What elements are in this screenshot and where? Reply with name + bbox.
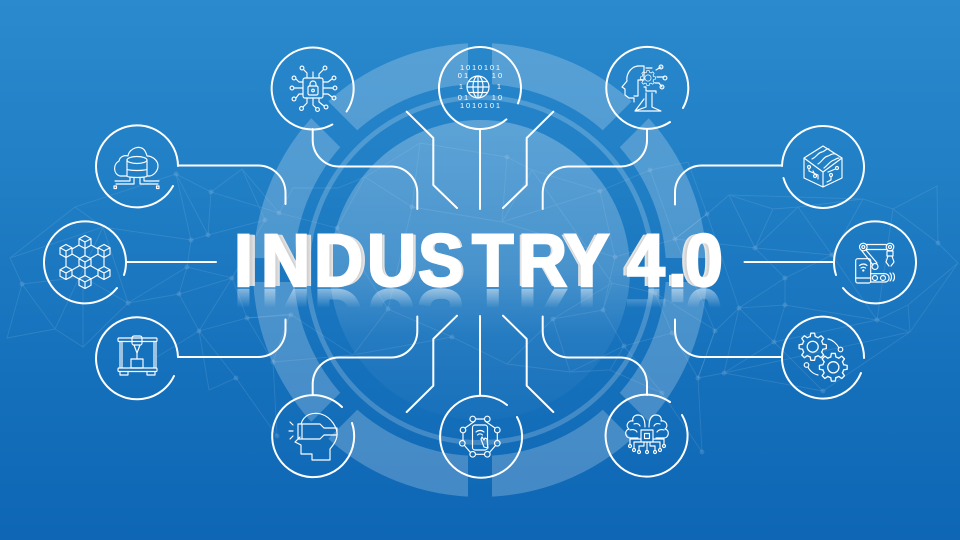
badge: globe with binary data: 1 — [497, 82, 501, 91]
badge: AI brain chip — [606, 395, 688, 477]
segmented outer ring — [274, 64, 686, 476]
title: INDUSTRY 4.0: I — [234, 219, 253, 302]
title: INDUSTRY 4.0: D — [314, 219, 363, 302]
badge: globe with binary data — [439, 47, 521, 129]
title: INDUSTRY 4.0: 4 — [627, 219, 665, 302]
badge: connected blocks — [44, 221, 126, 303]
badge: mobile device network — [440, 396, 522, 478]
title: INDUSTRY 4.0: U — [367, 219, 416, 302]
central ring graphic — [254, 43, 706, 497]
badge: globe with binary data: 0 1 — [458, 71, 468, 80]
title reflection — [237, 288, 720, 306]
badge: globe with binary data: 1 — [459, 82, 463, 91]
badge: globe with binary data: 1 0 1 0 1 0 1 — [460, 101, 500, 110]
badge: VR headset head — [272, 395, 354, 477]
title: INDUSTRY 4.0 — [237, 232, 722, 306]
title: INDUSTRY 4.0: T — [472, 219, 514, 302]
thin ring — [308, 98, 652, 442]
badge: cloud database — [96, 125, 178, 207]
title: INDUSTRY 4.0: S — [418, 219, 463, 302]
connector lines — [127, 112, 834, 412]
badge: 3D printer — [96, 317, 178, 399]
badge: globe with binary data: 1 0 — [492, 71, 502, 80]
badge: robotic arm and phone — [834, 221, 916, 303]
badge: cybersecurity chip — [272, 48, 354, 130]
badge: globe with binary data: 1 0 1 0 1 0 1 — [460, 63, 500, 72]
title: INDUSTRY 4.0: Y — [564, 219, 609, 302]
badge: smart cube — [782, 126, 864, 208]
badge: gears — [782, 317, 864, 399]
inner disc — [330, 120, 630, 420]
title: INDUSTRY 4.0: R — [518, 219, 567, 302]
badge: globe with binary data: 0 1 — [458, 93, 468, 102]
title: INDUSTRY 4.0: . — [668, 219, 687, 302]
title: INDUSTRY 4.0: 0 — [685, 219, 723, 302]
badge: globe with binary data: 1 0 — [492, 93, 502, 102]
title: INDUSTRY 4.0: N — [261, 219, 310, 302]
badge: AI head — [606, 47, 688, 129]
